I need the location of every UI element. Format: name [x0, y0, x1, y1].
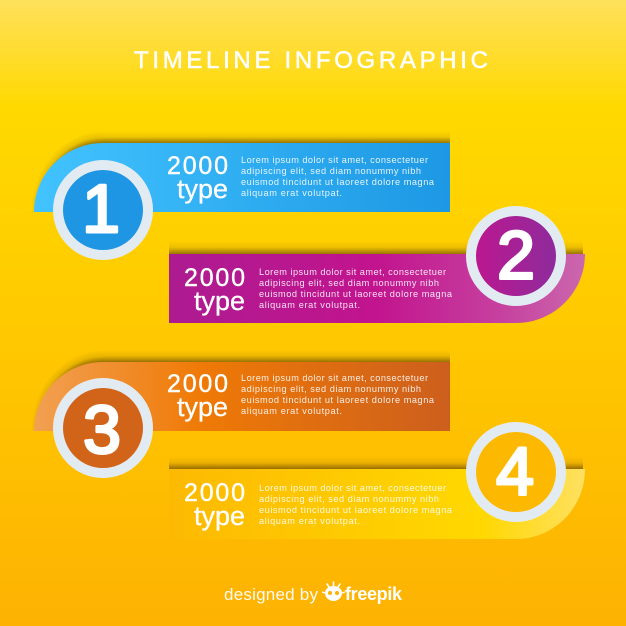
year and type: step 3: 2000 — [167, 370, 228, 398]
text block: step 3: aliquam erat volutpat. — [241, 406, 342, 416]
year and type: step 4: type — [194, 501, 245, 531]
text block: step 1: Lorem ipsum dolor sit amet, consectetuer — [241, 155, 428, 165]
text block: step 4 — [259, 483, 453, 526]
text block: step 2 — [259, 267, 453, 310]
text block: step 4: Lorem ipsum dolor sit amet, consectetuer — [259, 483, 446, 493]
text block: step 4: euismod tincidunt ut laoreet dolore magna — [259, 505, 453, 515]
year and type: step 2 — [184, 264, 245, 316]
footer credit: freepik — [345, 584, 403, 604]
ribbon: step 3 — [34, 362, 450, 431]
year and type: step 1: 2000 — [167, 152, 228, 180]
year and type: step 3: type — [177, 392, 228, 422]
shadow: step 2 — [169, 241, 583, 254]
icon: number 3 badge — [53, 378, 153, 478]
ribbon: step 1 — [34, 143, 450, 212]
footer credit: designed by — [224, 585, 318, 604]
year and type: step 4 — [184, 479, 245, 531]
text block: step 1: adipiscing elit, sed diam nonummy nibh — [241, 166, 421, 176]
text block: step 1: euismod tincidunt ut laoreet dolore magna — [241, 177, 435, 187]
text block: step 1: aliquam erat volutpat. — [241, 188, 342, 198]
icon: number 2 badge: 2 — [497, 218, 535, 294]
text block: step 3: euismod tincidunt ut laoreet dolore magna — [241, 395, 435, 405]
text block: step 2: adipiscing elit, sed diam nonummy nibh — [259, 278, 439, 288]
icon: number 4 badge: 4 — [496, 434, 534, 510]
shadow: step 4 — [169, 457, 583, 469]
year and type: step 2: type — [194, 286, 245, 316]
year and type: step 1 — [167, 152, 228, 204]
text block: step 3: Lorem ipsum dolor sit amet, consectetuer — [241, 373, 428, 383]
panel: step 2 — [169, 206, 585, 323]
icon: number 1 badge — [53, 160, 153, 260]
ribbon: step 4 — [169, 469, 585, 539]
text block: step 3 — [241, 373, 435, 416]
text block: step 2: aliquam erat volutpat. — [259, 300, 360, 310]
panel: step 3 — [31, 350, 450, 478]
icon: number 3 badge: 3 — [83, 392, 121, 468]
ribbon: step 2 — [169, 254, 585, 323]
icon: number 4 badge — [466, 422, 566, 522]
text block: step 1 — [241, 155, 435, 198]
text block: step 3: adipiscing elit, sed diam nonummy nibh — [241, 384, 421, 394]
shadow: step 1 — [31, 131, 450, 212]
year and type: step 2: 2000 — [184, 264, 245, 292]
text block: step 2: Lorem ipsum dolor sit amet, consectetuer — [259, 267, 446, 277]
footer credit — [224, 582, 403, 604]
year and type: step 4: 2000 — [184, 479, 245, 507]
icon: number 2 badge — [466, 206, 566, 306]
text block: step 4: adipiscing elit, sed diam nonummy nibh — [259, 494, 439, 504]
panel: step 1 — [31, 131, 450, 260]
shadow: step 3 — [31, 350, 450, 431]
panel: step 4 — [169, 422, 585, 539]
icon: number 1 badge: 1 — [82, 171, 120, 247]
icon: freepik mascot — [322, 582, 345, 601]
year and type: step 1: type — [177, 174, 228, 204]
year and type: step 3 — [167, 370, 228, 422]
title: TIMELINE INFOGRAPHIC — [134, 47, 488, 74]
text block: step 2: euismod tincidunt ut laoreet dolore magna — [259, 289, 453, 299]
text block: step 4: aliquam erat volutpat. — [259, 516, 360, 526]
